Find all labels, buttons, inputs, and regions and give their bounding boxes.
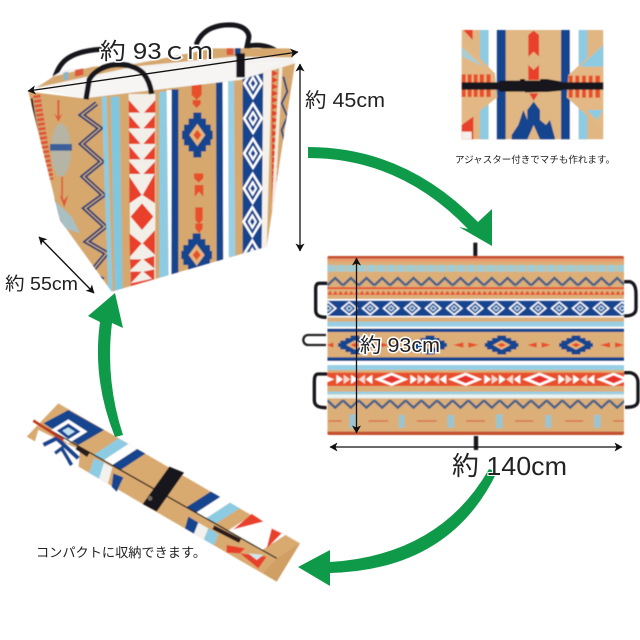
red triangle band	[327, 373, 624, 386]
bag height arrow	[299, 64, 301, 251]
left fold pale	[462, 47, 483, 67]
bag depth arrow	[39, 237, 94, 293]
zigzag inner line	[82, 103, 107, 280]
bottom blocks	[349, 414, 601, 428]
right fold pale	[580, 45, 603, 67]
dimension: bag width	[28, 38, 298, 91]
mat height label: 約 93cm	[360, 334, 440, 357]
low pale stripes	[327, 392, 624, 394]
body base colour	[28, 63, 296, 292]
arrow: mat to roll	[298, 469, 497, 586]
red arrowheads	[327, 342, 624, 348]
side panel bead band	[50, 144, 72, 151]
red fold stripes	[462, 74, 600, 98]
chevron navy	[43, 438, 78, 458]
panel: buckle detail photo	[462, 30, 603, 139]
centre chevrons	[528, 31, 539, 101]
corner marks	[463, 30, 473, 40]
front handle	[86, 53, 241, 99]
centre left stripes	[159, 92, 169, 283]
buckle	[499, 79, 562, 92]
mat height arrow	[356, 258, 358, 433]
mat handles and tabs	[303, 243, 638, 450]
right stripes	[561, 30, 570, 139]
diamond ring white	[50, 419, 87, 443]
upper pale stripes	[327, 322, 624, 327]
left corner fold	[462, 40, 497, 125]
side panel washed motif	[51, 123, 71, 177]
upper navy stripe	[327, 329, 624, 332]
fabric base	[462, 30, 603, 139]
diamond ring navy	[57, 423, 81, 439]
lower navy stripe	[327, 357, 624, 361]
panel: tote bag photo	[20, 25, 303, 297]
centre right stripes	[216, 80, 223, 263]
top pale dashes	[327, 265, 624, 272]
arrow: roll to bag	[88, 293, 123, 437]
upper sawtooth	[327, 290, 624, 295]
arrow: bag to mat	[308, 147, 492, 246]
strap	[462, 82, 603, 90]
bag width arrow	[28, 52, 298, 91]
lower pale stripes	[327, 361, 624, 365]
bottom edge	[327, 432, 624, 435]
chevron navy lower	[55, 448, 72, 465]
back rim stripes	[63, 48, 241, 81]
centre kilim motif	[182, 112, 213, 158]
roll stripes	[89, 438, 240, 545]
upper zigzag	[327, 276, 624, 288]
panel: flat mat photo	[303, 243, 638, 450]
diamond column	[242, 67, 263, 272]
lower zigzag	[327, 398, 624, 411]
red triangle column	[129, 94, 155, 290]
diamond core	[62, 427, 75, 436]
side panel blue patch	[55, 202, 80, 234]
bottom arrows	[328, 419, 624, 423]
panel: rolled mat photo	[27, 403, 300, 582]
navy zigzag	[82, 103, 107, 280]
bag inner lining	[33, 49, 295, 98]
top red ticks	[327, 259, 624, 261]
caption: compact storage: コンパクトに収納できます。	[36, 545, 206, 560]
left pale stripes	[102, 97, 113, 293]
kilim motifs	[338, 335, 593, 355]
roll seam	[33, 421, 277, 558]
right white stripe	[262, 70, 272, 253]
centre red chevrons	[192, 83, 203, 233]
roll red triangles	[227, 514, 285, 568]
centre kilim	[512, 102, 555, 139]
top pale band	[327, 265, 624, 272]
mat base	[327, 256, 624, 435]
bag height label: 約 45cm	[305, 89, 385, 112]
roll end cap	[263, 543, 300, 582]
bag depth label: 約 55cm	[5, 274, 78, 294]
right red sawtooth	[272, 70, 278, 210]
right corner fold	[567, 43, 603, 130]
bag body print	[28, 63, 296, 292]
centre lower kilim motif	[181, 233, 212, 277]
roll upper diamond	[43, 410, 104, 445]
side panel red edge	[37, 95, 50, 180]
bag lining highlight	[42, 62, 283, 98]
mat width arrow	[330, 446, 622, 448]
roll lower chevrons	[35, 430, 80, 468]
strap rivet	[148, 496, 152, 501]
roll base	[27, 403, 300, 582]
top edge band	[327, 256, 624, 259]
side panel arrows	[54, 100, 68, 207]
navy diamond band	[327, 299, 624, 317]
roll strap	[143, 467, 184, 512]
upper red line	[327, 287, 624, 289]
right pale edge	[272, 63, 283, 210]
right zigzag	[282, 77, 287, 144]
mat width label: 約 140cm	[452, 451, 567, 481]
caption: adjuster: アジャスター付きでマチも作れます。	[455, 154, 615, 166]
bag back handles	[53, 25, 283, 87]
left stripes	[480, 30, 489, 139]
bag width label: 約 93ｃｍ	[100, 38, 213, 64]
kilim centre	[527, 125, 540, 139]
dimension: bag depth	[5, 237, 94, 294]
right fold lower pale	[587, 110, 603, 120]
side corner seam	[32, 98, 65, 228]
bag back rim	[37, 48, 293, 88]
